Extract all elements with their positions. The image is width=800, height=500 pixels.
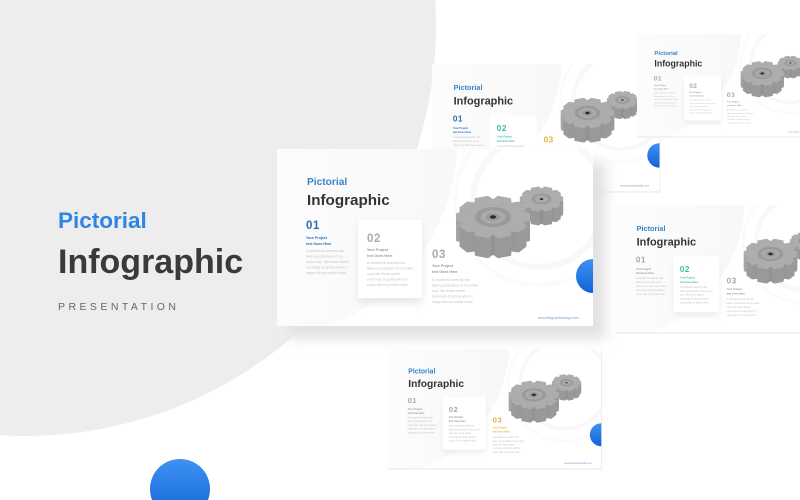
slide preview: top right: 01 [654, 75, 662, 82]
slide preview: bottom: 01 [408, 396, 417, 405]
slide preview: top right: taken possession of my entire [727, 112, 754, 115]
slide preview: top right: 02 [689, 83, 697, 90]
slide preview: top right: enjoy with my whole heart. [654, 104, 678, 107]
slide preview: bottom: taken possession of my entire [449, 428, 481, 431]
slide preview: bottom: Pictorial [408, 368, 435, 375]
slide preview: right: Your Project [680, 275, 695, 279]
slide preview: right: A wonderful serenity has [680, 286, 708, 289]
slide preview: top right: A wonderful serenity has [727, 109, 749, 112]
slide preview: top centre: Your Project [497, 134, 512, 138]
step 03 [432, 249, 478, 304]
slide preview: bottom: taken possession of my entire [493, 440, 525, 443]
step 01: Your Project [306, 236, 328, 240]
step 01: 01 [306, 220, 320, 232]
slide preview: top centre: text Goes Here [497, 139, 516, 143]
step 02 card: text Goes Here [367, 254, 392, 258]
step 03: soul, like these sweet [432, 289, 465, 293]
slide preview: right: text Goes Here [636, 271, 655, 275]
slide preview: right: 03 [727, 276, 737, 285]
slide preview: bottom: text Goes Here [449, 420, 466, 423]
slide preview: bottom: A wonderful serenity has [408, 417, 434, 420]
slide preview: right: enjoy with my whole heart. [727, 314, 757, 317]
slide preview: top right: enjoy with my whole heart. [727, 121, 751, 124]
step 01: mornings of spring which I [306, 266, 347, 270]
slide preview: top right: 03 [727, 92, 735, 99]
step 01 [306, 220, 349, 275]
slide preview: top centre: A wonderful serenity has [497, 145, 525, 148]
step 02 card: mornings of spring which I [367, 278, 408, 282]
slide preview: bottom: enjoy with my whole heart. [493, 451, 521, 454]
slide title: Pictorial: Pictorial [307, 177, 347, 188]
slide preview: bottom: text Goes Here [493, 431, 510, 434]
slide preview: right: soul, like these sweet [680, 294, 704, 297]
website footer: www.infographicdesign.com [538, 316, 579, 320]
slide preview: right: taken possession of my entire [680, 290, 714, 293]
slide preview: top right: mornings of spring which I [689, 108, 713, 111]
slide preview: bottom: mornings of spring which I [493, 447, 520, 450]
slide preview: top right: Your Project [689, 91, 702, 94]
step 03: enjoy with my whole heart. [432, 300, 473, 304]
slide preview: top centre: A wonderful serenity has [453, 136, 481, 139]
slide preview: bottom [388, 350, 602, 470]
slide preview: top right: A wonderful serenity has [654, 92, 676, 95]
slide preview: top right: soul, like these sweet [689, 105, 709, 108]
subtitle: Presentation: PRESENTATION [58, 301, 176, 313]
slide preview: bottom: soul, like these sweet [449, 432, 472, 435]
slide preview: top centre: entire soul, like these sweet [453, 144, 484, 147]
step 01: text Goes Here [306, 242, 331, 246]
slide preview: bottom: Infographic [408, 379, 464, 390]
step 02 card: enjoy with my whole heart. [367, 283, 408, 287]
slide preview: top right: taken possession of my [654, 95, 675, 98]
slide preview: right: Pictorial [637, 224, 666, 233]
step 01: A wonderful serenity has [306, 249, 344, 253]
step 01: taken possession of my [306, 254, 343, 258]
step 03: A wonderful serenity has [432, 278, 470, 282]
slide preview: bottom: A wonderful serenity has [493, 436, 519, 439]
step 02 card: A wonderful serenity has [367, 261, 405, 265]
slide preview: top right: Your Project [727, 100, 739, 103]
slide preview: right: Infographic [637, 236, 696, 248]
step 02 card: Your Project [367, 248, 389, 252]
step 02 card: 02 [367, 233, 381, 245]
slide preview: bottom: 02 [449, 405, 458, 414]
slide preview: top centre: 01 [453, 115, 463, 124]
slide preview: top right: soul, like these sweet [727, 115, 746, 118]
heading: Infographic: Infographic [58, 243, 243, 281]
slide preview: bottom: mornings of spring which I [408, 428, 435, 431]
blue half circle [576, 259, 593, 293]
slide preview: bottom: www.infographicdesign.com [564, 462, 592, 465]
slide preview: right: text Goes Here [727, 291, 745, 295]
step 03: taken possession of my entire [432, 284, 478, 288]
slide preview: bottom: enjoy with my whole heart. [408, 431, 436, 434]
slide preview: top right: entire soul, like these sweet [654, 98, 679, 101]
slide preview: top centre: 02 [497, 124, 507, 133]
slide preview: top centre: www.infographicdesign.com [620, 184, 649, 187]
slide preview: top right: mornings of spring which I [727, 118, 751, 121]
slide preview: bottom: enjoy with my whole heart. [449, 439, 477, 442]
step 02 card [358, 220, 422, 303]
slide preview: right: mornings of spring which I [636, 289, 665, 292]
title block [58, 208, 243, 313]
slide preview: bottom: soul, like these sweet [493, 444, 515, 447]
slide preview: bottom: A wonderful serenity has [449, 425, 475, 428]
slide preview: top right: enjoy with my whole heart. [689, 111, 713, 114]
slide preview: top right: Infographic [654, 58, 702, 68]
slide preview: right: A wonderful serenity has [727, 298, 755, 301]
slide preview: bottom: Your Project [449, 416, 463, 419]
slide preview: bottom: Your Project [408, 408, 422, 411]
background circle [0, 0, 436, 436]
step 03: text Goes Here [432, 270, 457, 274]
decorative blue circle [150, 459, 210, 500]
slide preview: right: enjoy with my whole heart. [636, 293, 666, 296]
slide preview: right: A wonderful serenity has [636, 277, 664, 280]
slide preview: right: enjoy with my whole heart. [680, 302, 710, 305]
slide preview: top right: text Goes Here [654, 88, 669, 91]
slide preview: right: mornings of spring which I [680, 298, 709, 301]
slide preview: right [616, 226, 800, 334]
main slide [277, 149, 610, 342]
icon: gears [456, 186, 563, 259]
slide preview: top centre: Infographic [454, 95, 513, 107]
slide preview: top right: taken possession of my entire [689, 102, 717, 105]
slide preview: right: taken possession of my entire [727, 302, 760, 305]
slide preview: bottom: entire soul, like these sweet [408, 424, 437, 427]
slide preview: right: mornings of spring which I [727, 310, 756, 313]
slide preview: top centre: taken possession of my [453, 140, 480, 143]
step 03: mornings of spring which I [432, 294, 473, 298]
step 02 card: taken possession of my entire [367, 266, 413, 270]
slide preview: top centre [432, 64, 660, 192]
step 01: enjoy with my whole heart. [306, 271, 347, 275]
slide preview: top centre: text Goes Here [453, 130, 472, 134]
slide preview: top right: text Goes Here [689, 95, 705, 98]
slide preview: right: entire soul, like these sweet [636, 285, 667, 288]
slide preview: right: Your Project [636, 267, 651, 271]
slide preview: top right [637, 51, 800, 138]
step 03: 03 [432, 249, 446, 261]
slide preview: right: taken possession of my [636, 281, 663, 284]
slide title: Infographic: Infographic [307, 192, 390, 209]
heading: Pictorial: Pictorial [58, 208, 147, 233]
slide preview: bottom: taken possession of my [408, 420, 433, 423]
step 03: Your Project [432, 264, 454, 268]
slide preview: bottom: text Goes Here [408, 412, 425, 415]
slide preview: top centre: Pictorial [454, 83, 483, 92]
slide preview: top centre: 03 [544, 135, 554, 144]
step 01: entire soul, like these sweet [306, 260, 349, 264]
slide preview: top right: Your Project [654, 84, 666, 87]
step 02 card: soul, like these sweet [367, 272, 400, 276]
slide preview: top right: text Goes Here [727, 104, 742, 107]
slide preview: top centre: Your Project [453, 126, 468, 130]
slide preview: top right: A wonderful serenity has [689, 99, 711, 102]
slide preview: right: Your Project [727, 287, 742, 291]
slide preview: top right: Pictorial [654, 51, 678, 57]
slide preview: right: text Goes Here [680, 280, 699, 284]
slide preview: right: 01 [636, 256, 646, 265]
slide preview: right: 02 [680, 265, 690, 274]
slide preview: right: soul, like these sweet [727, 306, 751, 309]
slide preview: bottom: 03 [493, 416, 502, 425]
slide preview: bottom: mornings of spring which I [449, 436, 477, 439]
slide preview: bottom: Your Project [493, 427, 507, 430]
slide preview: top right: mornings of spring which I [654, 101, 678, 104]
